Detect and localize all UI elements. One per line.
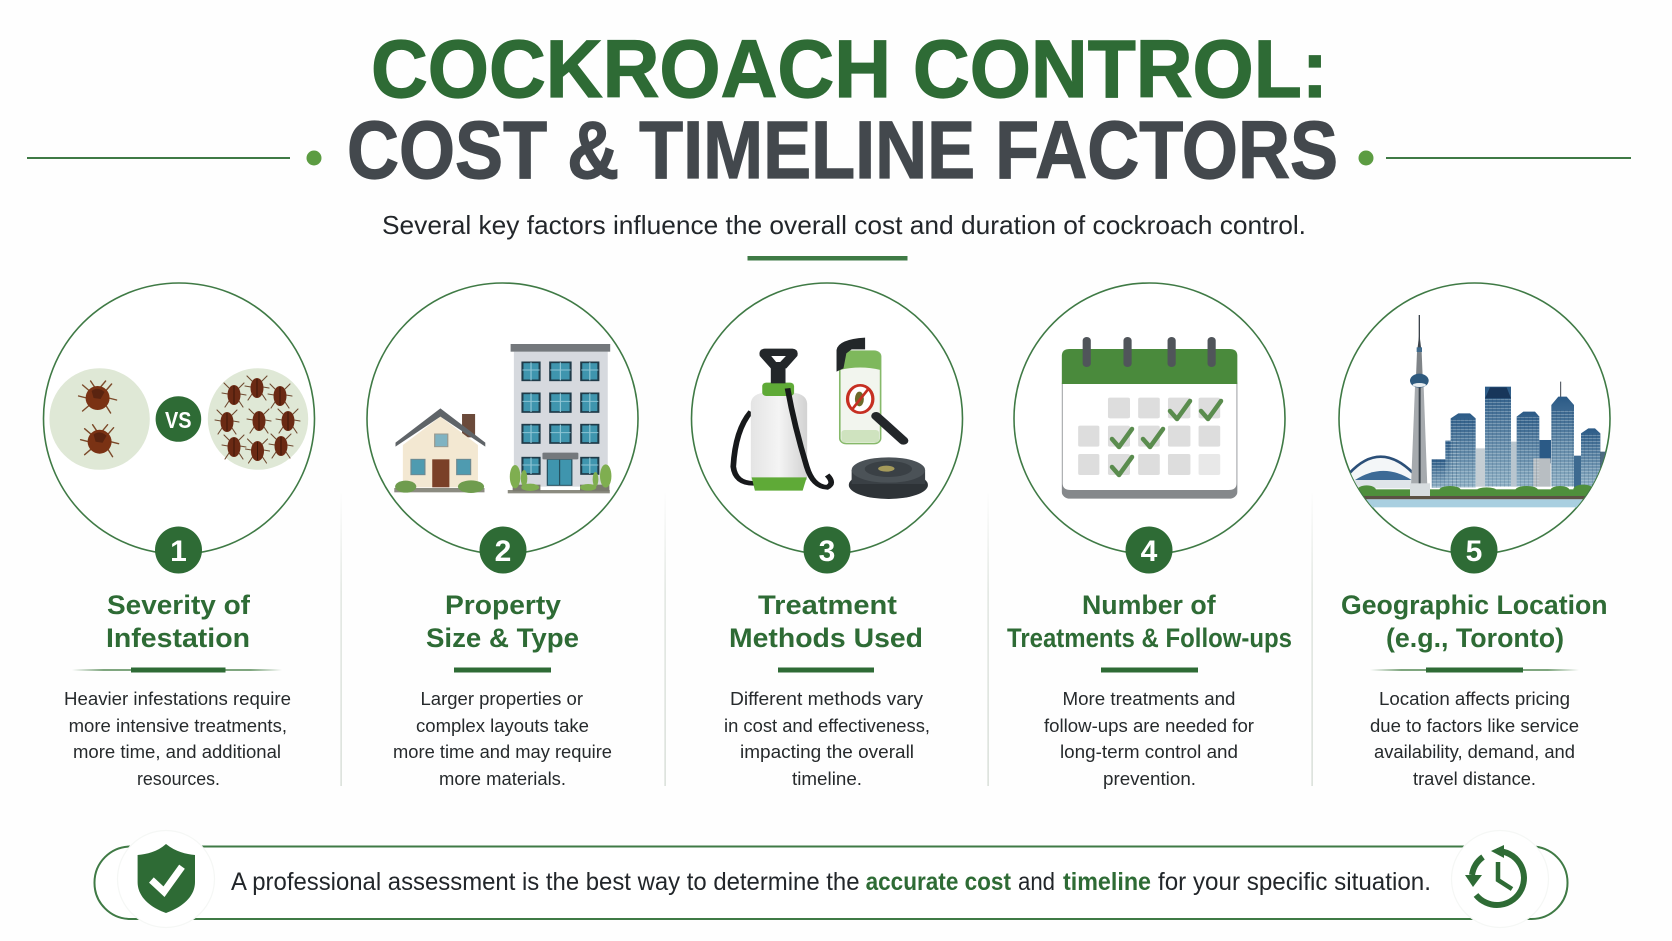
circle frame 1: [44, 283, 314, 554]
calendar checkmarks: [1112, 401, 1221, 475]
title: [347, 24, 1338, 196]
rule 5: [1370, 668, 1579, 672]
number badge 4: 4: [1141, 535, 1158, 568]
heading 3: Methods Used: [729, 623, 923, 653]
heading 2: Property: [445, 590, 561, 620]
description 4: long-term control and: [1060, 741, 1238, 762]
number badge 2: 2: [495, 535, 511, 568]
icon: sprayer, spray bottle and bait trap: [733, 338, 928, 499]
description 5: due to factors like service: [1370, 715, 1579, 736]
number badge 1: 1: [170, 535, 187, 568]
description 1: Heavier infestations require: [64, 688, 291, 709]
rule 2: [454, 668, 551, 672]
circle frame 2: [367, 283, 638, 554]
number badge 3: [804, 526, 850, 574]
description 3: Different methods vary: [730, 688, 924, 709]
description 2: more materials.: [439, 768, 566, 789]
description 4: follow-ups are needed for: [1044, 715, 1254, 736]
heading 2: Size & Type: [426, 623, 579, 653]
description 2: more time and may require: [393, 741, 612, 762]
number badge 3: 3: [819, 535, 835, 568]
heading 4: [1007, 590, 1292, 653]
heading 3: [729, 590, 923, 653]
number badge 5: [1450, 526, 1498, 574]
panel: property size and type: [367, 283, 638, 789]
description 5: Location affects pricing: [1379, 688, 1570, 709]
description 4: prevention.: [1103, 768, 1196, 789]
panel: severity of infestation: [44, 283, 314, 789]
icon: few vs many cockroaches: [49, 368, 308, 470]
heading 2: [426, 590, 579, 653]
panel: treatment methods used: [692, 283, 962, 789]
CN tower: [1410, 315, 1429, 487]
description 2: [393, 688, 612, 789]
pump sprayer: [733, 349, 831, 491]
waterfront: [1353, 483, 1597, 507]
callout text: timeline: [1063, 868, 1151, 896]
heading 4: Treatments & Follow-ups: [1007, 623, 1292, 653]
description 1: more time, and additional: [73, 741, 281, 762]
circle frame 5: [1339, 283, 1610, 554]
description 2: Larger properties or: [420, 688, 583, 709]
icon: house and apartment building: [394, 344, 611, 493]
spray bottle: [837, 338, 903, 444]
rule 4: [1101, 668, 1198, 672]
description 5: [1370, 688, 1579, 789]
subtitle: Several key factors influence the overall cost and duration of cockroach control.: [382, 210, 1306, 240]
description 2: complex layouts take: [416, 715, 589, 736]
description 4: [1044, 688, 1254, 789]
subtitle rule: [748, 256, 908, 260]
title ornament left: [27, 150, 322, 166]
callout frame: [94, 846, 1568, 919]
title line 1: COCKROACH CONTROL:: [371, 24, 1328, 115]
heading 1: Infestation: [106, 623, 250, 653]
heading 5: (e.g., Toronto): [1386, 623, 1564, 653]
heading 5: Geographic Location: [1341, 590, 1608, 620]
description 1: more intensive treatments,: [69, 715, 287, 736]
heading 1: [106, 590, 251, 653]
heading 1: Severity of: [107, 590, 251, 620]
towers: [1432, 382, 1607, 488]
callout text: and: [1018, 868, 1055, 896]
description 5: travel distance.: [1413, 768, 1536, 789]
circle frame 4: [1014, 283, 1285, 554]
rule 3: [778, 668, 874, 672]
callout: professional assessment: [94, 830, 1568, 928]
panel: geographic location: [1339, 283, 1610, 789]
callout text: [231, 868, 1431, 896]
icon: Toronto skyline: [1349, 315, 1607, 507]
title line 2: COST & TIMELINE FACTORS: [347, 105, 1338, 196]
description 1: resources.: [137, 768, 220, 789]
icon: clock with circular arrows: [1452, 830, 1548, 928]
number badge 2: [480, 526, 526, 574]
icon: few vs many cockroaches: VS: [165, 407, 192, 433]
panel: number of treatments and follow-ups: [1007, 283, 1292, 789]
number badge 4: [1126, 526, 1172, 574]
rule 1: [72, 668, 282, 672]
dome stadium: [1349, 457, 1413, 488]
icon: calendar with checkmarks: [1062, 337, 1237, 499]
description 3: in cost and effectiveness,: [724, 715, 930, 736]
heading 4: Number of: [1082, 590, 1217, 620]
callout text: accurate cost: [866, 868, 1012, 896]
column separators: [340, 490, 1313, 786]
house: [394, 408, 485, 493]
apartment: [508, 344, 611, 493]
callout text: for your specific situation.: [1158, 868, 1431, 896]
bait station: [849, 457, 928, 499]
icon: shield with check: [118, 830, 214, 928]
callout text: A professional assessment is the best way to determine the: [231, 868, 860, 896]
number badge 5: 5: [1466, 535, 1482, 568]
description 1: [64, 688, 291, 789]
description 5: availability, demand, and: [1374, 741, 1575, 762]
circle frame 3: [692, 283, 962, 554]
heading 3: Treatment: [758, 590, 897, 620]
number badge 1: [155, 526, 202, 574]
title ornament right: [1358, 150, 1631, 166]
description 3: [724, 688, 930, 789]
heading 5: [1341, 590, 1608, 653]
description 3: timeline.: [792, 768, 862, 789]
description 4: More treatments and: [1062, 688, 1236, 709]
description 3: impacting the overall: [740, 741, 914, 762]
